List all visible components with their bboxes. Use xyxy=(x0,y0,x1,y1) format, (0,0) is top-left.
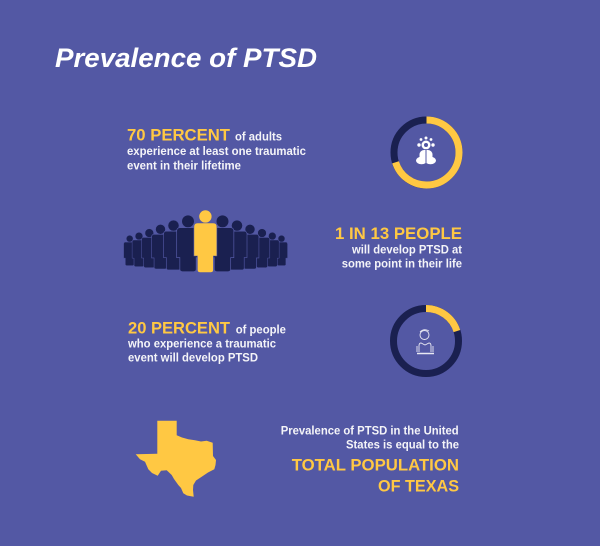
title: Prevalence of PTSD xyxy=(55,43,317,73)
text block: 70 percent: event in their lifetime xyxy=(127,158,241,172)
text block: Texas comparison: TOTAL POPULATION xyxy=(292,455,459,474)
text block: Texas comparison xyxy=(281,423,459,496)
text block: 20 percent: who experience a traumatic xyxy=(127,336,276,350)
icon: map of Texas xyxy=(136,421,216,497)
person silhouettes xyxy=(124,215,288,272)
highlighted person xyxy=(194,210,217,272)
text block: 70 percent xyxy=(127,126,306,172)
donut chart: 20 percent xyxy=(394,308,458,374)
text block: 70 percent: 70 PERCENT xyxy=(127,126,231,145)
text block: 1 in 13 people: will develop PTSD at xyxy=(351,242,462,256)
text block: 20 percent: of people xyxy=(236,322,286,336)
text block: 1 in 13 people: some point in their life xyxy=(342,257,462,271)
text block: 20 percent: 20 PERCENT xyxy=(128,318,231,337)
text block: Texas comparison: OF TEXAS xyxy=(378,477,459,496)
icon: person at desk xyxy=(417,330,434,354)
icon: crowd of people xyxy=(124,210,288,272)
donut chart: 70 percent xyxy=(394,120,459,185)
text block: Texas comparison: Prevalence of PTSD in the United xyxy=(281,423,459,437)
text block: 1 in 13 people xyxy=(335,224,462,271)
text block: Texas comparison: States is equal to the xyxy=(346,437,459,451)
text block: 70 percent: experience at least one traumatic xyxy=(127,144,306,158)
icon: meditating figure xyxy=(416,136,436,164)
text block: 20 percent xyxy=(127,318,286,365)
text block: 1 in 13 people: 1 IN 13 PEOPLE xyxy=(335,224,462,243)
text block: 70 percent: of adults xyxy=(235,130,282,144)
text block: 20 percent: event will develop PTSD xyxy=(128,351,258,365)
